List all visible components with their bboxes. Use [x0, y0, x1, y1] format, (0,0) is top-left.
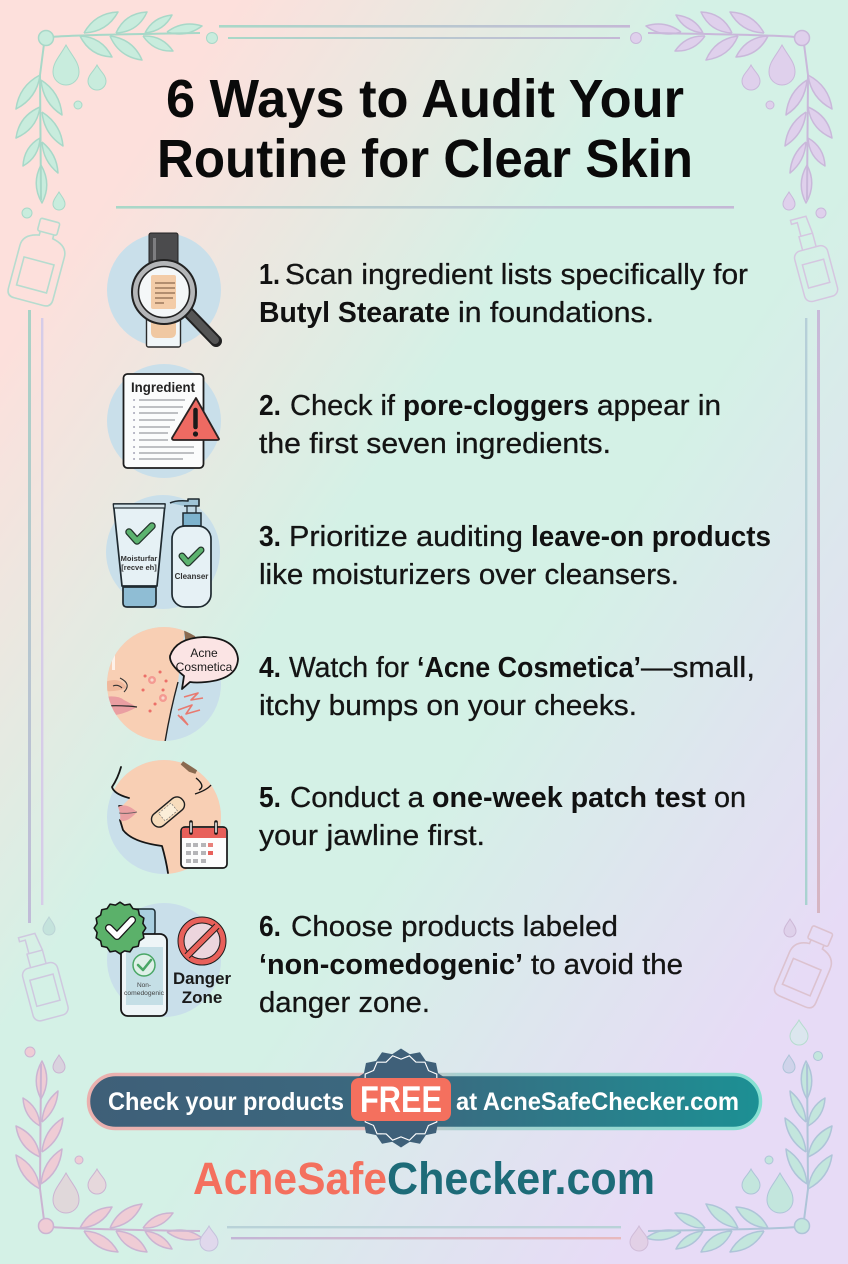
step 1 text — [259, 259, 748, 329]
step 5 text: your jawline first. — [259, 820, 485, 852]
step 4 text: ‘Acne Cosmetica’ — [417, 652, 641, 684]
step 5 text: Conduct a — [290, 782, 425, 814]
title divider — [116, 206, 734, 209]
icon: acne cosmetica face: Cosmetica — [176, 660, 233, 674]
icon: acne cosmetica face: Acne — [190, 646, 218, 660]
step 1 text: in foundations. — [458, 297, 654, 329]
step 6 text: to avoid the — [531, 949, 683, 981]
banner text — [108, 1088, 739, 1116]
icon: moisturizer tube and cleanser bottle — [106, 495, 220, 609]
step 6 text — [259, 911, 683, 1019]
decorative corner: bottom right — [646, 919, 843, 1252]
step 4 text — [259, 652, 755, 722]
step 4 text: itchy bumps on your cheeks. — [259, 690, 637, 722]
icon: moisturizer tube and cleanser bottle: Moisturfar — [121, 554, 157, 563]
icon: non-comedogenic bottle and danger zone: Non- — [137, 982, 151, 989]
step 3 text: Prioritize auditing — [289, 521, 523, 553]
call to action banner — [88, 1047, 760, 1149]
step 1 text: Butyl Stearate — [259, 297, 450, 329]
step 2 text: Check if — [290, 390, 396, 422]
decorative corner: top left — [6, 12, 218, 308]
step 3 text: 3. — [259, 521, 281, 553]
free label: FREE — [360, 1079, 442, 1120]
icon: non-comedogenic bottle and danger zone: comedogenic — [124, 990, 165, 997]
decorative corner: top right — [630, 12, 839, 303]
step 4 text: 4. — [259, 652, 281, 684]
title: Routine for Clear Skin — [157, 129, 693, 189]
icon: moisturizer tube and cleanser bottle: Cleanser — [175, 572, 208, 581]
border lines: left — [28, 310, 43, 923]
step 6 text: ‘non-comedogenic’ — [259, 949, 523, 981]
website wordmark: Checker.com — [387, 1153, 655, 1204]
step 5 text: on — [714, 782, 746, 814]
website wordmark — [193, 1153, 655, 1204]
icon: ingredient list with warning — [107, 364, 221, 478]
step 4 text: Watch for — [289, 652, 409, 684]
step 3 text: leave-on products — [531, 521, 771, 553]
step 2 text: 2. — [259, 390, 281, 422]
step 1 text: 1. — [259, 259, 280, 291]
step 3 text — [259, 521, 771, 591]
step 5 text: 5. — [259, 782, 281, 814]
step 3 text: like moisturizers over cleansers. — [259, 559, 679, 591]
step 5 text: one-week patch test — [432, 782, 706, 814]
step 2 text: appear in — [597, 390, 721, 422]
icon: non-comedogenic bottle and danger zone: Danger — [173, 969, 231, 988]
step 4 text: —small, — [641, 652, 755, 684]
icon: ingredient list with warning: Ingredient — [131, 380, 195, 395]
banner text: at AcneSafeChecker.com — [456, 1088, 739, 1116]
icon: jawline patch test with calendar — [107, 760, 228, 874]
icon: non-comedogenic bottle and danger zone — [94, 902, 231, 1017]
border lines: top — [219, 25, 630, 39]
step 6 text: 6. — [259, 911, 281, 943]
border lines: bottom — [200, 1226, 648, 1251]
icon: acne cosmetica face — [107, 627, 239, 741]
step 2 text: pore-cloggers — [403, 390, 589, 422]
icon: moisturizer tube and cleanser bottle: [recve eh] — [121, 563, 157, 572]
decorative corner: bottom left — [13, 917, 202, 1252]
icon: non-comedogenic bottle and danger zone: Zone — [182, 988, 222, 1007]
title — [157, 69, 693, 189]
banner text: Check your products — [108, 1088, 344, 1116]
step 5 text — [259, 782, 746, 852]
icon: magnifier over foundation bottle — [107, 233, 221, 347]
website wordmark: AcneSafe — [193, 1153, 387, 1204]
title: 6 Ways to Audit Your — [166, 69, 684, 129]
step 6 text: Choose products labeled — [291, 911, 618, 943]
step 6 text: danger zone. — [259, 987, 430, 1019]
step 1 text: Scan ingredient lists specifically for — [285, 259, 748, 291]
step 2 text — [259, 390, 721, 460]
step 2 text: the first seven ingredients. — [259, 428, 611, 460]
border lines: right — [805, 310, 820, 913]
free badge — [350, 1047, 452, 1149]
